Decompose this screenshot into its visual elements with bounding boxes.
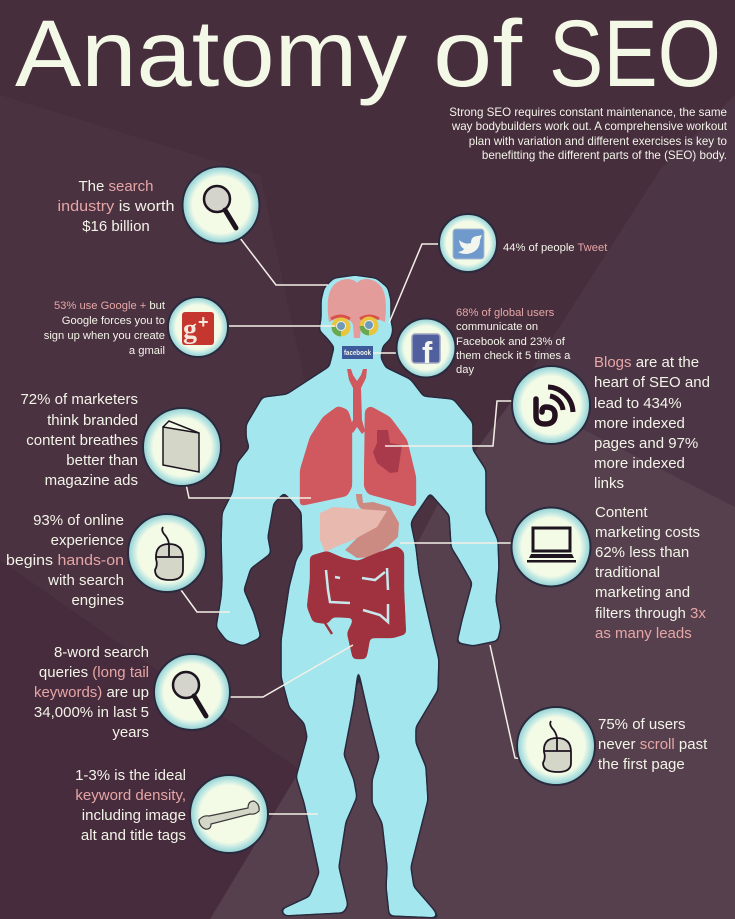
text: mouse — [6, 512, 124, 609]
text: long tail keywords — [34, 644, 149, 741]
text: content marketing: Content — [595, 504, 648, 521]
text: blogs: more indexed — [594, 415, 685, 432]
title — [15, 1, 721, 107]
text: facebook: 68% of global users — [456, 307, 555, 319]
icon: search circle — [182, 166, 260, 244]
liver — [320, 507, 387, 552]
text: google plus: a gmail — [129, 345, 165, 357]
text: search industry: industry is worth — [58, 198, 174, 215]
text: blogs — [594, 354, 710, 492]
text: scroll — [598, 716, 708, 773]
text: long tail keywords: queries (long tail — [39, 664, 149, 681]
text: magazine: think branded — [47, 412, 138, 429]
text: mouse: experience — [51, 532, 124, 549]
text: content marketing: marketing and — [595, 584, 690, 601]
text: search industry — [58, 178, 174, 235]
text: google plus: sign up when you create — [44, 330, 165, 342]
text: long tail keywords: 34,000% in last 5 — [34, 704, 149, 721]
icon: blog circle — [512, 366, 590, 444]
icon: google plus circle: + — [198, 312, 209, 332]
body figure — [217, 276, 500, 917]
icon: twitter circle — [439, 214, 497, 272]
icon: chrome eyes — [331, 316, 379, 336]
text: magazine — [20, 391, 138, 489]
text: keyword density: 1-3% is the ideal — [75, 767, 186, 784]
icon: facebook circle — [396, 318, 456, 378]
text: content marketing: marketing costs — [595, 524, 700, 541]
text: long tail keywords: 8-word search — [54, 644, 149, 661]
text: magazine: 72% of marketers — [20, 391, 138, 408]
text: long tail keywords: keywords) are up — [34, 684, 149, 701]
title: of — [433, 1, 523, 107]
text: blogs: Blogs are at the — [594, 354, 699, 371]
intro text — [449, 106, 728, 162]
text: search industry: $16 billion — [82, 218, 150, 235]
brain — [328, 279, 386, 338]
text: scroll: 75% of users — [598, 716, 686, 733]
text: mouse: begins hands-on — [6, 552, 124, 569]
icon: facebook mouth — [342, 346, 373, 359]
lungs — [300, 406, 416, 507]
text: facebook: day — [456, 364, 474, 376]
text: facebook: communicate on — [456, 321, 538, 333]
icon: magazine circle — [143, 408, 221, 486]
text: search industry: The search — [78, 178, 154, 195]
intro text: plan with variation and different exercises is key to — [469, 135, 727, 148]
text: content marketing: as many leads — [595, 625, 692, 642]
text: long tail keywords: years — [112, 724, 149, 741]
text: keyword density: alt and title tags — [81, 827, 186, 844]
icon: laptop circle — [512, 508, 590, 586]
text: keyword density: including image — [82, 807, 186, 824]
stomach — [345, 494, 399, 558]
text: content marketing: traditional — [595, 564, 660, 581]
text: google plus: Google forces you to — [62, 315, 165, 327]
text: blogs: more indexed — [594, 455, 685, 472]
icon: facebook mouth: facebook — [344, 350, 371, 357]
text: facebook: Facebook and 23% of — [456, 336, 566, 348]
text: blogs: lead to 434% — [594, 395, 682, 412]
text: magazine: content breathes — [26, 432, 138, 449]
text: magazine: magazine ads — [45, 472, 138, 489]
text: mouse: engines — [71, 592, 124, 609]
text: scroll: never scroll past — [598, 736, 708, 753]
text: magazine: better than — [66, 452, 138, 469]
intro text: benefitting the different parts of the (SEO) body. — [482, 149, 727, 162]
text: keyword density: keyword density, — [75, 787, 186, 804]
text: facebook: them check it 5 times a — [456, 350, 571, 362]
trachea — [347, 369, 367, 434]
icon: mouse circle 2 — [517, 707, 595, 785]
text: content marketing: 62% less than — [595, 544, 689, 561]
icon: mouse circle — [128, 514, 206, 592]
text: blogs: pages and 97% — [594, 435, 698, 452]
text: blogs: heart of SEO and — [594, 374, 710, 391]
text: twitter: 44% of people Tweet — [503, 242, 608, 254]
text: mouse: 93% of online — [33, 512, 124, 529]
text: google plus — [44, 300, 166, 357]
intestines — [307, 546, 406, 659]
text: google plus: 53% use Google + but — [54, 300, 166, 312]
icon: google plus circle — [168, 297, 228, 357]
text: content marketing: filters through 3x — [595, 605, 706, 622]
text: scroll: the first page — [598, 756, 685, 773]
text: facebook — [456, 307, 571, 376]
connector lines — [181, 238, 530, 814]
text: blogs: links — [594, 475, 624, 492]
icon: facebook circle: f — [422, 335, 433, 370]
icon: google plus circle: g — [183, 314, 197, 345]
text: content marketing — [595, 504, 706, 642]
heart — [373, 430, 402, 473]
text: mouse: with search — [47, 572, 124, 589]
intro text: Strong SEO requires constant maintenance, the same — [449, 106, 727, 119]
text: keyword density — [75, 767, 186, 844]
icon: bone circle — [190, 775, 268, 853]
title: Anatomy — [15, 1, 408, 107]
icon: search circle 2 — [154, 654, 230, 730]
intro text: way bodybuilders work out. A comprehensive workout — [451, 120, 728, 133]
